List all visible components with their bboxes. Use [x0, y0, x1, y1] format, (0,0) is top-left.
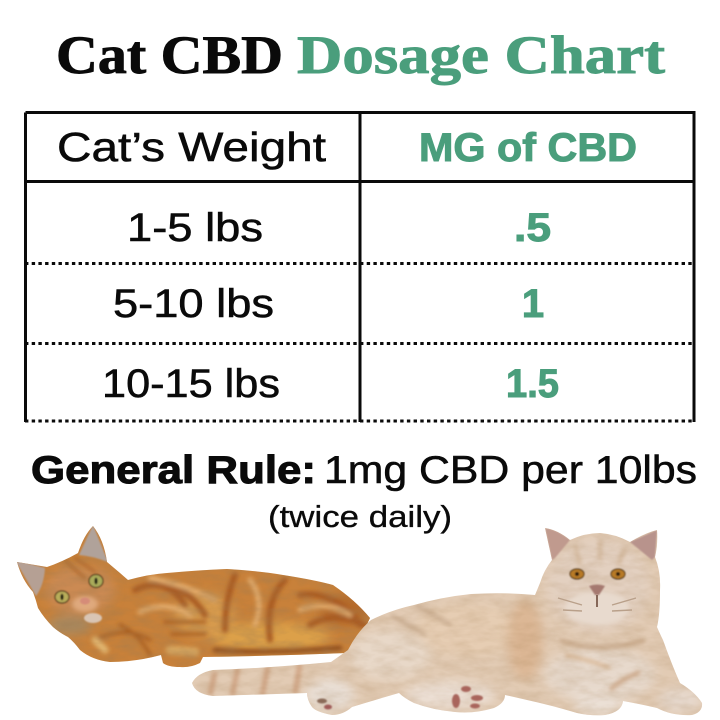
row: 5-10 lbs	[113, 282, 544, 326]
general rule: General Rule:	[31, 449, 316, 492]
title: Dosage Chart	[297, 25, 665, 85]
row: 5-10 lbs: 1	[522, 282, 544, 326]
muzzle	[72, 596, 98, 612]
row: 10-15 lbs: 10-15 lbs	[102, 362, 280, 406]
texture	[196, 532, 700, 715]
orange tabby cat	[17, 526, 370, 668]
ears	[15, 525, 108, 596]
twice daily note: (twice daily)	[268, 499, 452, 534]
row: 1-5 lbs: .5	[514, 206, 551, 250]
column header: weight: Cat’s Weight	[57, 124, 327, 170]
fur shading	[45, 565, 370, 652]
row: 1-5 lbs: 1-5 lbs	[127, 206, 263, 250]
dosage table	[25, 112, 694, 422]
cream cat	[180, 520, 710, 720]
general rule	[31, 449, 697, 492]
fur shading	[306, 537, 702, 715]
title	[56, 25, 665, 85]
paw pads	[317, 686, 483, 710]
eyes	[570, 569, 625, 579]
texture	[28, 558, 370, 666]
table grid	[25, 112, 694, 422]
row: 1-5 lbs	[127, 206, 551, 250]
general rule: 1mg CBD per 10lbs	[324, 449, 697, 492]
column header: mg of CBD: MG of CBD	[419, 126, 637, 170]
eyes	[55, 574, 103, 603]
muzzle	[565, 591, 629, 625]
ears	[545, 528, 657, 560]
row: 5-10 lbs: 5-10 lbs	[113, 282, 274, 326]
row: 10-15 lbs: 1.5	[506, 362, 559, 406]
title: Cat CBD	[56, 25, 283, 85]
row: 10-15 lbs	[102, 362, 559, 406]
